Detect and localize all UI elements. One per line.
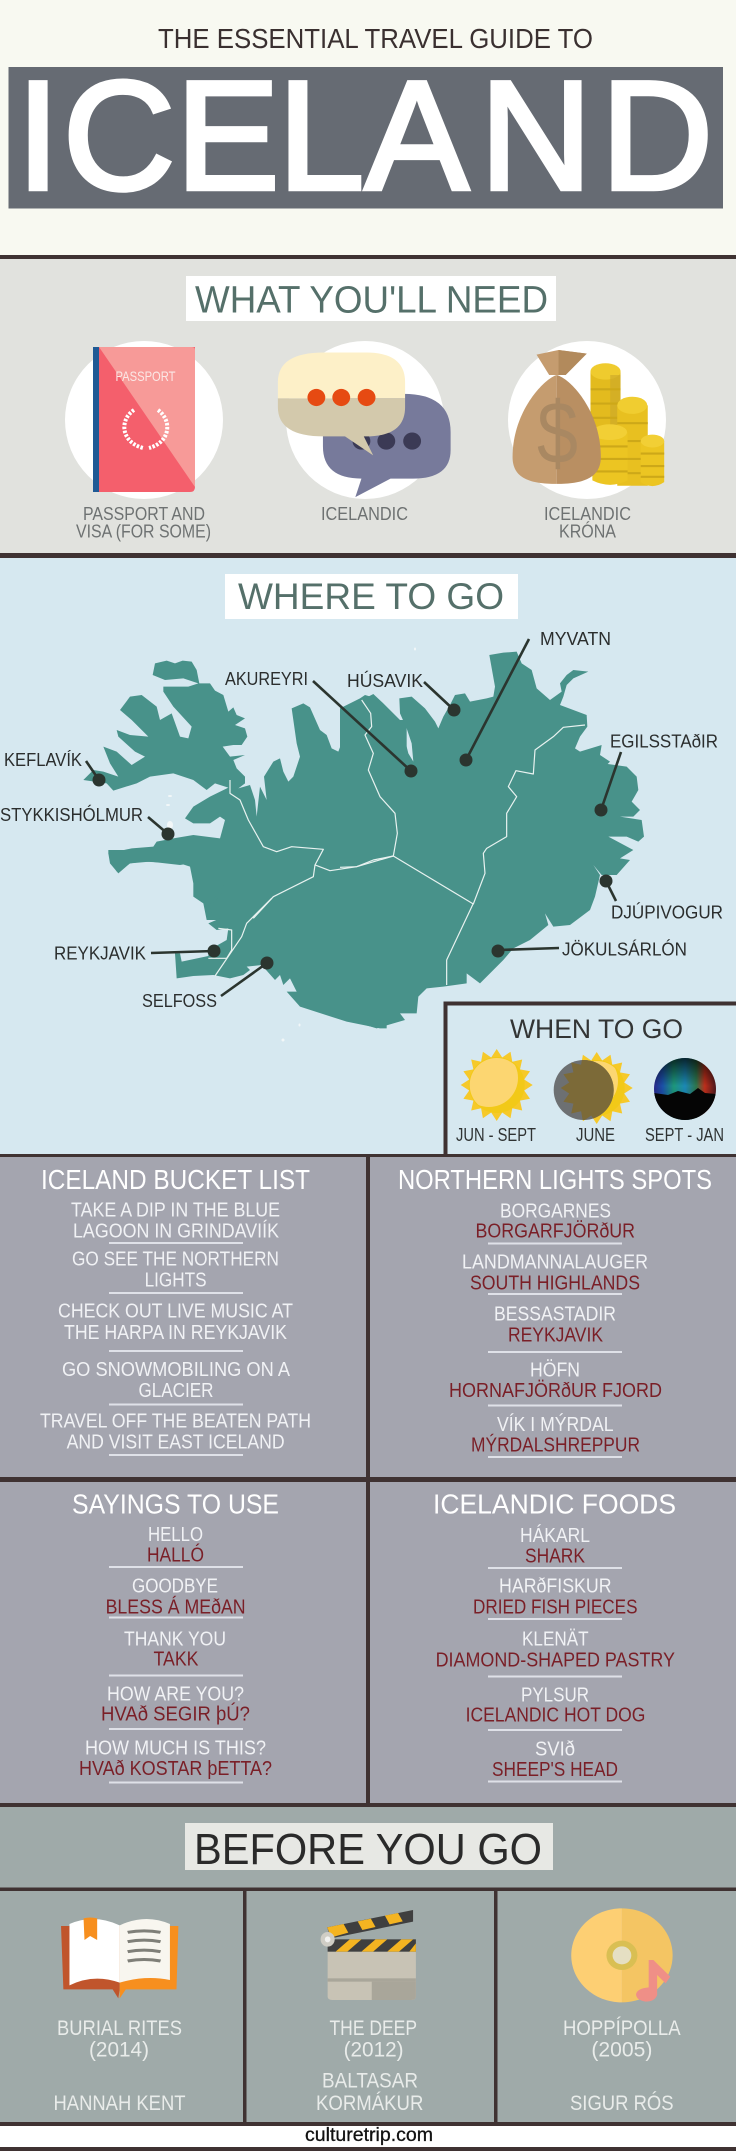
book caption: (2014): [89, 2039, 149, 2062]
icon: sun: [460, 1049, 533, 1121]
heading: where to go: WHERE TO GO: [238, 576, 504, 617]
label: icelandic: ICELANDIC: [321, 503, 408, 524]
map labels: DJÚPIVOGUR: [611, 902, 723, 922]
footer bar: [0, 2147, 736, 2151]
sayings list: HVAð KOSTAR þETTA?: [79, 1758, 272, 1780]
film caption: [316, 2017, 423, 2115]
icon: passport: [65, 341, 223, 499]
icon: aurora: [654, 1058, 716, 1120]
spots list: LANDMANNALAUGER: [462, 1251, 648, 1273]
map of Iceland: [83, 648, 644, 1042]
label: icelandic krona: KRÓNA: [559, 520, 617, 542]
icon: midnight sun: [554, 1052, 633, 1124]
film caption: (2012): [344, 2039, 404, 2062]
foods list: HÁKARL: [520, 1524, 590, 1547]
foods list: SHEEP'S HEAD: [492, 1759, 618, 1781]
spots list: [449, 1201, 662, 1456]
book caption: [54, 2017, 186, 2115]
spots list: BESSASTADIR: [494, 1304, 616, 1326]
panel: when to go: [446, 1004, 736, 1154]
bucket list items: GO SNOWMOBILING ON A: [62, 1359, 291, 1381]
label: icelandic krona: ICELANDIC: [544, 503, 631, 524]
heading: bucket list: ICELAND BUCKET LIST: [41, 1164, 310, 1195]
spots list: HORNAFJÖRðUR FJORD: [449, 1380, 662, 1402]
map labels: EGILSSTAðIR: [610, 730, 718, 752]
foods list: HARðFISKUR: [499, 1576, 612, 1598]
spots list: VÍK I MÝRDAL: [497, 1413, 614, 1436]
map labels: STYKKISHÓLMUR: [0, 804, 143, 825]
vertical divider: [366, 1157, 370, 1803]
film caption: THE DEEP: [330, 2017, 417, 2040]
small islands: [166, 648, 416, 1042]
panel: icelandic foods: [370, 1482, 736, 1803]
map labels: JÖKULSÁRLÓN: [562, 939, 687, 960]
map labels: MYVATN: [540, 628, 611, 649]
icon: speech bubbles: [278, 341, 451, 499]
map labels: AKUREYRI: [225, 668, 308, 689]
foods list: DIAMOND-SHAPED PASTRY: [436, 1650, 675, 1672]
divider bar: [0, 255, 736, 259]
bucket list items: THE HARPA IN REYKJAVIK: [64, 1322, 288, 1344]
heading: when to go: WHEN TO GO: [510, 1014, 683, 1044]
sayings list: GOODBYE: [132, 1576, 218, 1598]
foods list: ICELANDIC HOT DOG: [466, 1705, 645, 1727]
music caption: (2005): [591, 2039, 652, 2062]
leader lines: [86, 639, 621, 996]
label: passport and visa: PASSPORT AND: [83, 503, 205, 524]
divider bar: [0, 2122, 736, 2126]
map labels: KEFLAVÍK: [4, 749, 83, 770]
spots list: BORGARFJÖRðUR: [476, 1221, 635, 1243]
film caption: KORMÁKUR: [316, 2092, 423, 2115]
spots list: SOUTH HIGHLANDS: [470, 1272, 640, 1294]
map labels: [0, 628, 723, 1011]
footer: culturetrip.com: [0, 2125, 736, 2147]
bucket list items: AND VISIT EAST ICELAND: [67, 1431, 285, 1453]
icon: money bag and coins: $: [537, 383, 578, 482]
book caption: BURIAL RITES: [57, 2017, 182, 2040]
sayings list: BLESS Á MEðAN: [106, 1595, 246, 1618]
map pins: [92, 704, 612, 970]
divider bars between list panels: [0, 1154, 736, 1158]
music caption: SIGUR RÓS: [570, 2092, 674, 2115]
icon: money bag and coins: [508, 341, 666, 499]
foods list: [436, 1524, 675, 1781]
icon: music disc: [571, 1908, 673, 2002]
spots list: HÖFN: [530, 1360, 580, 1382]
header panel: [0, 0, 736, 255]
bucket list items: CHECK OUT LIVE MUSIC AT: [58, 1301, 293, 1323]
foods list: PYLSUR: [521, 1684, 589, 1706]
panel: Iceland bucket list: [0, 1157, 366, 1477]
icon: passport: PASSPORT: [116, 368, 176, 384]
heading: sayings to use: SAYINGS TO USE: [72, 1488, 279, 1519]
title banner: Iceland: ICELAND: [17, 49, 713, 222]
bucket list items: [40, 1200, 311, 1453]
bucket list items: TAKE A DIP IN THE BLUE: [71, 1200, 280, 1222]
foods list: KLENÄT: [522, 1628, 589, 1650]
label: passport and visa: VISA (FOR SOME): [76, 520, 211, 542]
region borders: [208, 700, 585, 985]
heading: icelandic foods: ICELANDIC FOODS: [433, 1488, 676, 1519]
label: june: JUNE: [576, 1125, 615, 1145]
sayings list: THANK YOU: [124, 1628, 226, 1650]
icon: film clapper: [321, 1910, 416, 2000]
heading: what you'll need: WHAT YOU'LL NEED: [195, 280, 548, 322]
horizontal divider: [0, 1803, 736, 1807]
sayings list: HOW MUCH IS THIS?: [85, 1737, 266, 1759]
panel: northern lights spots: [370, 1157, 736, 1477]
bucket list items: LAGOON IN GRINDAVIÍK: [73, 1220, 280, 1243]
sayings list: HELLO: [148, 1524, 203, 1546]
panel: sayings to use: [0, 1482, 366, 1803]
music caption: [563, 2017, 681, 2115]
spots list: BORGARNES: [500, 1201, 611, 1223]
foods list: SHARK: [525, 1545, 586, 1567]
horizontal divider: [0, 1477, 736, 1482]
bucket list items: TRAVEL OFF THE BEATEN PATH: [40, 1410, 311, 1432]
sayings list: HALLÓ: [147, 1544, 204, 1567]
panel: where to go: [0, 558, 736, 1154]
bucket list items: LIGHTS: [145, 1270, 207, 1292]
bucket list items: GLACIER: [138, 1380, 214, 1402]
icon: book: [61, 1917, 178, 1998]
spots list: MÝRDALSHREPPUR: [471, 1433, 640, 1456]
heading: before you go: BEFORE YOU GO: [194, 1825, 542, 1874]
sayings list: HVAð SEGIR þÚ?: [101, 1703, 250, 1726]
foods list: DRIED FISH PIECES: [473, 1597, 638, 1619]
spots list: REYKJAVIK: [508, 1325, 604, 1347]
panel: what you'll need: [0, 259, 736, 553]
sayings list: TAKK: [154, 1649, 199, 1671]
label: icelandic krona: [544, 503, 631, 542]
book caption: HANNAH KENT: [54, 2092, 186, 2115]
title: the essential travel guide to: THE ESSENTIAL TRAVEL GUIDE TO: [158, 23, 593, 54]
foods list: SVIð: [535, 1739, 575, 1761]
map labels: SELFOSS: [142, 990, 217, 1011]
footer: culturetrip.com: culturetrip.com: [305, 2125, 433, 2146]
label: jun - sept: JUN - SEPT: [456, 1125, 536, 1145]
bucket list items: GO SEE THE NORTHERN: [72, 1249, 279, 1271]
panel: before you go: [0, 1807, 736, 2122]
film caption: BALTASAR: [322, 2070, 418, 2093]
map labels: HÚSAVIK: [347, 670, 424, 691]
sayings list: [79, 1524, 272, 1780]
map labels: REYKJAVIK: [54, 942, 147, 964]
divider bar: [0, 553, 736, 558]
music caption: HOPPÍPOLLA: [563, 2017, 681, 2040]
sayings list: HOW ARE YOU?: [107, 1684, 244, 1706]
label: passport and visa: [76, 503, 211, 542]
